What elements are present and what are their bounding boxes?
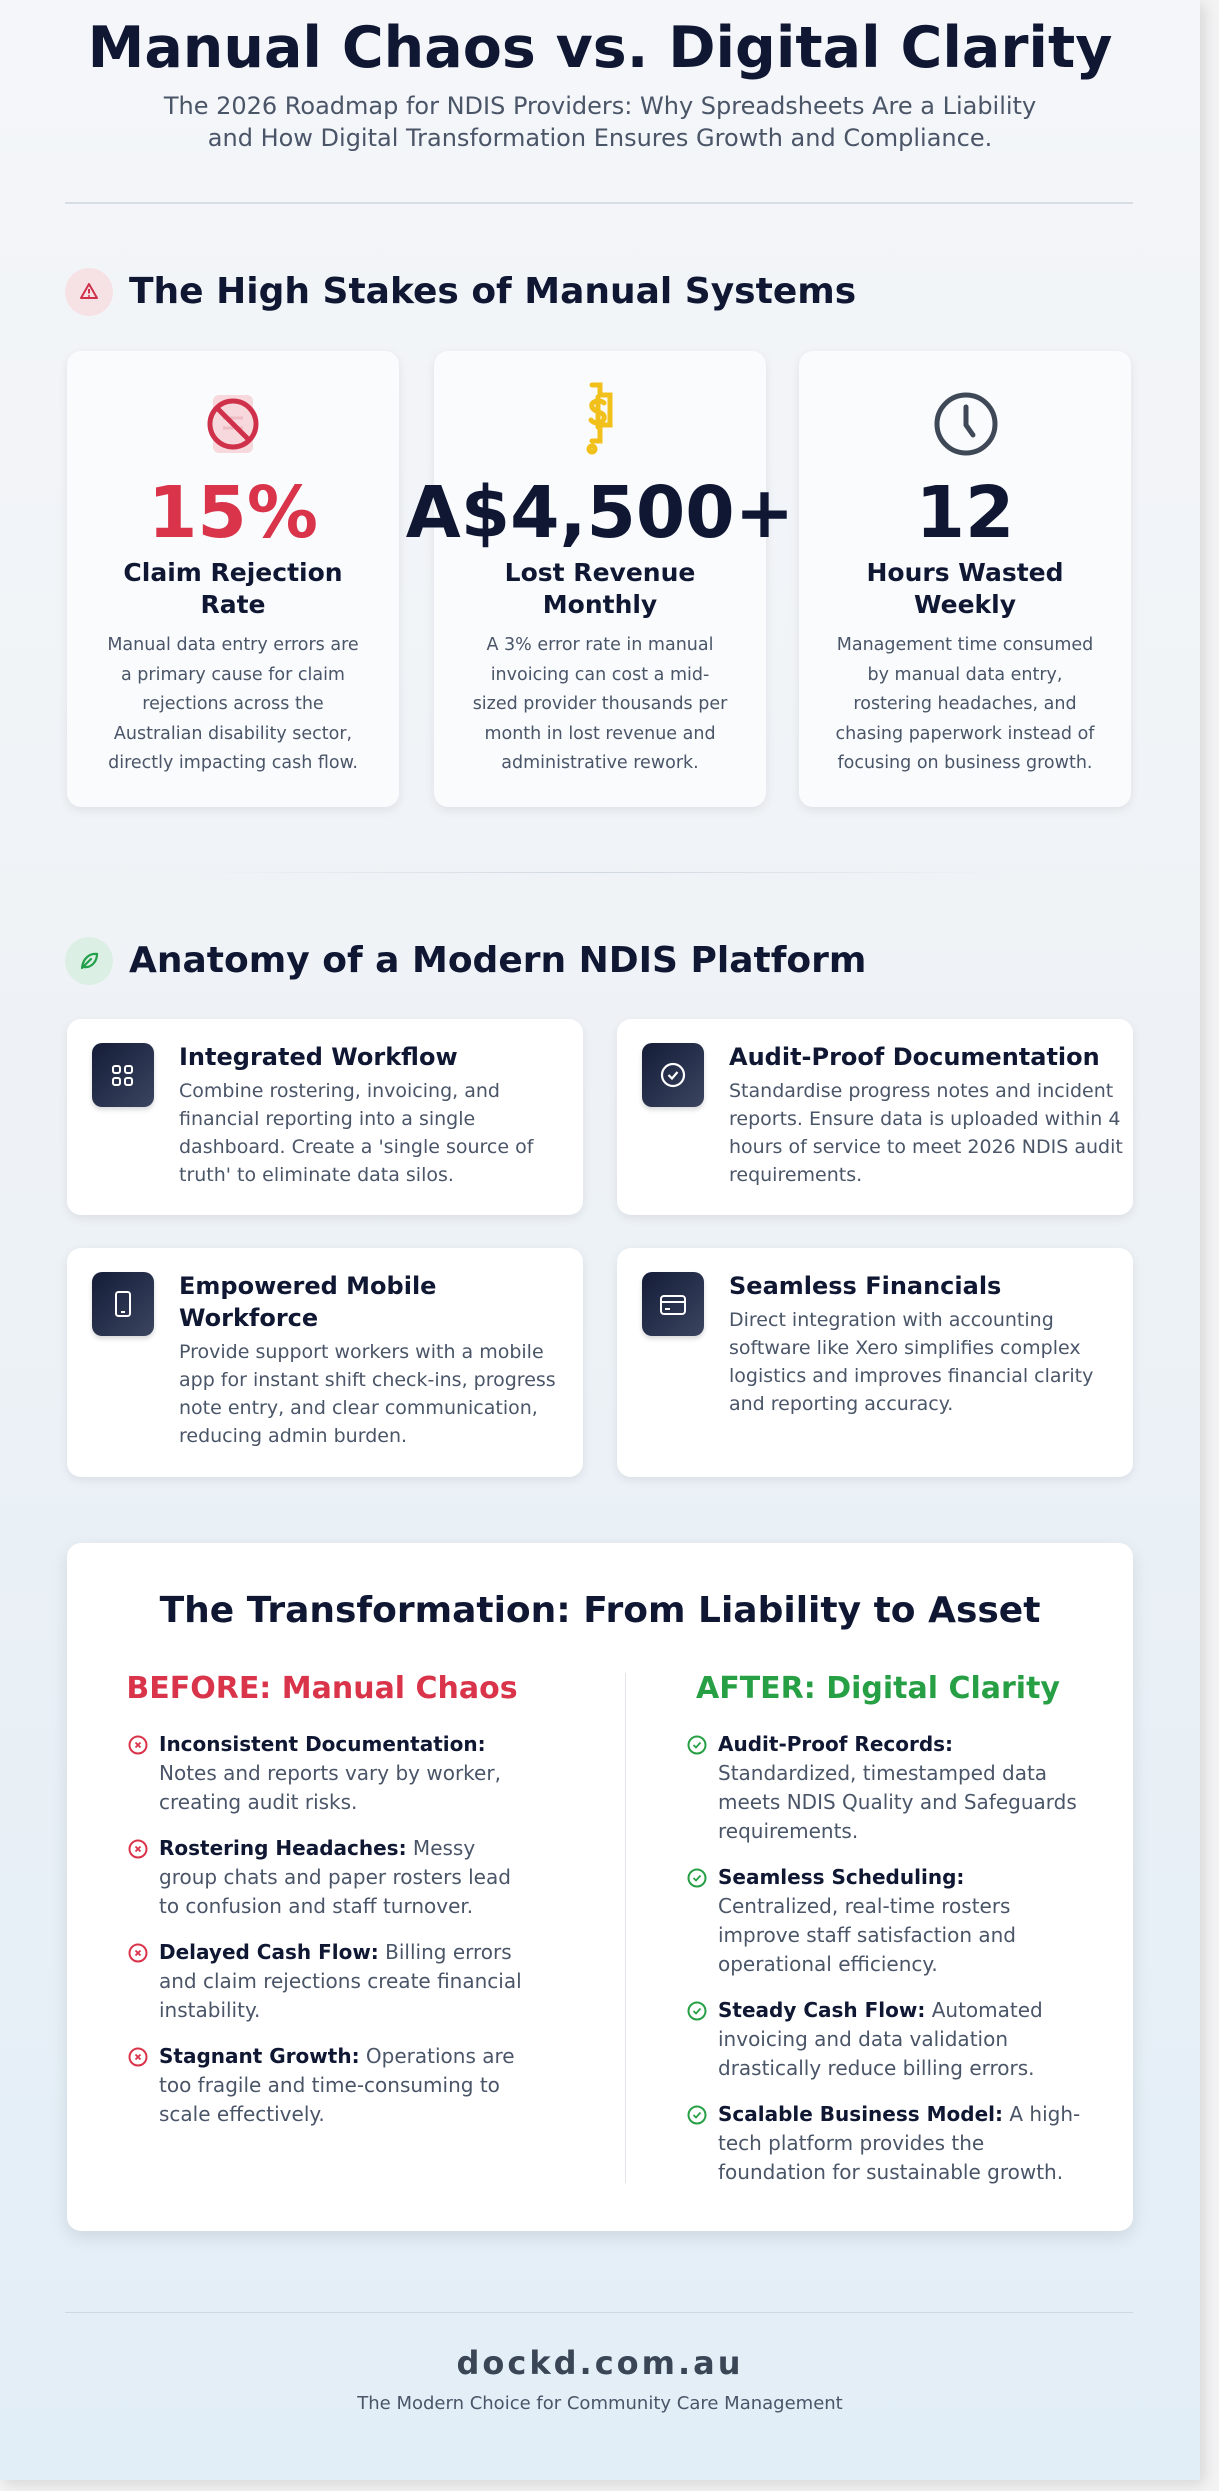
footer brand: dockd.com.au: [456, 2344, 744, 2382]
icon: check circle: [642, 1043, 704, 1107]
after heading: AFTER: Digital Clarity: [696, 1671, 1060, 1706]
stat card: claim rejection: Manual data entry errors are a primary cause for claim rejections across the Australian disability sector, directly impacting cash flow.: [107, 635, 359, 773]
item: stagnant growth: Stagnant Growth: Operations are too fragile and time-consuming to scale effectively.: [159, 2044, 515, 2126]
section heading: high stakes: The High Stakes of Manual Systems: [129, 271, 856, 312]
section heading: anatomy: Anatomy of a Modern NDIS Platform: [129, 940, 866, 981]
feature: mobile workforce: Provide support workers with a mobile app for instant shift check-ins, progress note entry, and clear communication, reducing admin burden.: [179, 1341, 556, 1447]
stat card: lost revenue: A$4,500+: [406, 471, 794, 554]
feature: audit-proof documentation: Standardise progress notes and incident reports. Ensure data is uploaded within 4 hours of service to meet 2026 NDIS audit requirements.: [729, 1080, 1123, 1186]
heading: The Transformation: From Liability to Asset: [160, 1590, 1040, 1631]
title: Manual Chaos vs. Digital Clarity: [88, 15, 1112, 81]
subtitle: [164, 92, 1036, 152]
stat card: lost revenue: A 3% error rate in manual invoicing can cost a mid-sized provider thousands per month in lost revenue and administrative rework.: [473, 635, 727, 773]
panel: transformation: [67, 1543, 1133, 2231]
item: scalable business model: Scalable Business Model: A high-tech platform provides the foundation for sustainable growth.: [718, 2102, 1080, 2184]
item: rostering headaches: Rostering Headaches: Messy group chats and paper rosters lead to confusion and staff turnover.: [159, 1836, 511, 1918]
feature: seamless financials: Seamless Financials: [729, 1272, 1001, 1300]
stat card: hours wasted: Management time consumed by manual data entry, rostering headaches, and chasing paperwork instead of focusing on business growth.: [836, 635, 1094, 773]
feature: seamless financials: [617, 1248, 1133, 1477]
feature: mobile workforce: Empowered Mobile Workforce: [179, 1272, 436, 1332]
icon: phone: [92, 1272, 154, 1336]
stat card: claim rejection: 15%: [148, 471, 318, 554]
feature: integrated workflow: [67, 1019, 583, 1215]
icon: leaf: [65, 937, 113, 985]
item: seamless scheduling: Seamless Scheduling: Centralized, real-time rosters improve staff satisfaction and operational efficiency.: [718, 1865, 1016, 1976]
icon: grid: [92, 1043, 154, 1107]
icon: clock: [934, 392, 998, 456]
before list: [128, 1732, 522, 2126]
subtitle: and How Digital Transformation Ensures Growth and Compliance.: [208, 124, 992, 152]
stat card: hours wasted: 12: [916, 471, 1014, 554]
stat card: hours wasted: Hours Wasted Weekly: [866, 558, 1064, 619]
icon: dollar: [586, 382, 612, 454]
footer tagline: The Modern Choice for Community Care Management: [357, 2393, 843, 2414]
feature: mobile workforce: [67, 1248, 583, 1477]
icon: ban: [208, 395, 258, 453]
feature: integrated workflow: Integrated Workflow: [179, 1043, 458, 1071]
icon: warning: [65, 268, 113, 316]
stat card: lost revenue: Lost Revenue Monthly: [505, 558, 695, 619]
subtitle: The 2026 Roadmap for NDIS Providers: Why Spreadsheets Are a Liability: [164, 92, 1036, 120]
stat card: hours wasted: [799, 351, 1131, 807]
before heading: BEFORE: Manual Chaos: [126, 1671, 518, 1706]
stat card: lost revenue: [434, 351, 766, 807]
feature: seamless financials: Direct integration with accounting software like Xero simplifies complex logistics and improves financial clarity and reporting accuracy.: [729, 1309, 1093, 1415]
stat card: claim rejection: Claim Rejection Rate: [123, 558, 343, 619]
item: delayed cash flow: Delayed Cash Flow: Billing errors and claim rejections create financial instability.: [159, 1940, 522, 2022]
feature: integrated workflow: Combine rostering, invoicing, and financial reporting into a single dashboard. Create a 'single source of truth' to eliminate data silos.: [179, 1080, 533, 1186]
stat card: claim rejection: [67, 351, 399, 807]
item: steady cash flow: Steady Cash Flow: Automated invoicing and data validation drastically reduce billing errors.: [718, 1998, 1043, 2080]
feature: audit-proof documentation: [617, 1019, 1133, 1215]
item: inconsistent documentation: Inconsistent Documentation: Notes and reports vary by worker, creating audit risks.: [159, 1732, 501, 1814]
icon: card: [642, 1272, 704, 1336]
feature: audit-proof documentation: Audit-Proof Documentation: [729, 1043, 1100, 1071]
after list: [688, 1732, 1080, 2184]
item: audit-proof records: Audit-Proof Records: Standardized, timestamped data meets NDIS Quality and Safeguards requirements.: [718, 1732, 1077, 1843]
